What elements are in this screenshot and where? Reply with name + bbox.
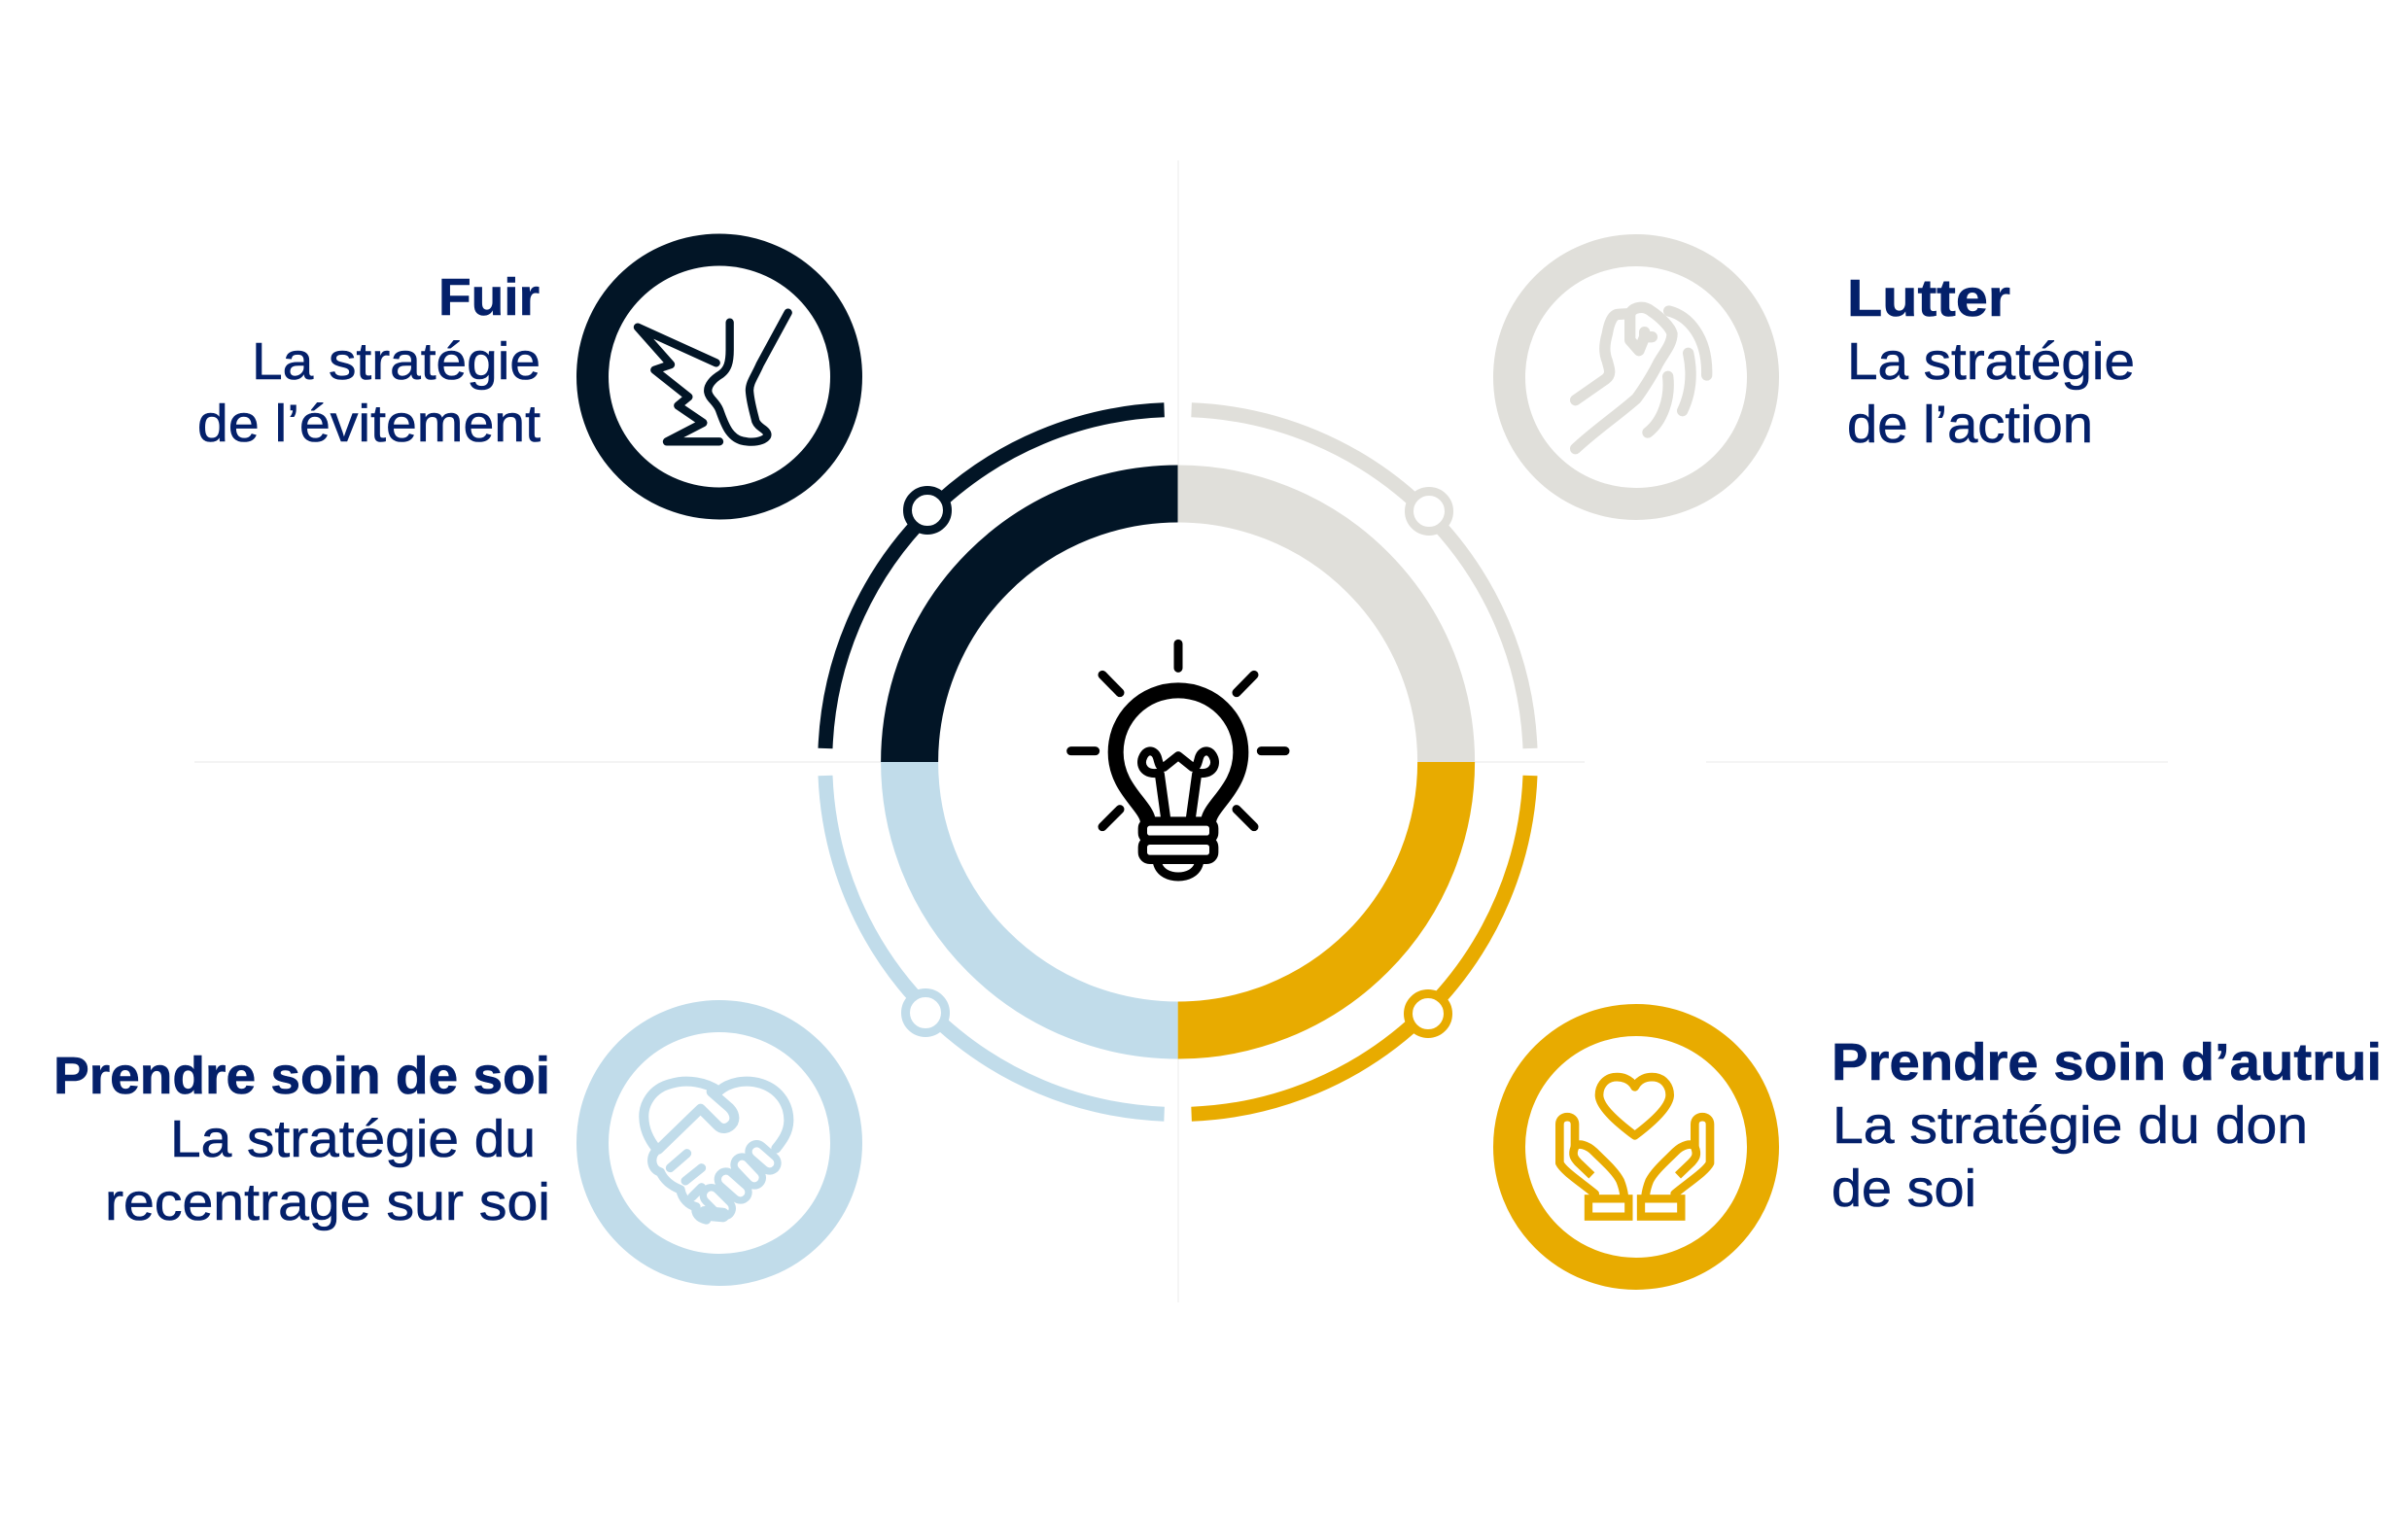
icon: light bulb: [1071, 643, 1285, 877]
text: Lutter: La stratégie: [1847, 333, 2135, 391]
text: Prendre soin de soi: [53, 1048, 550, 1231]
icon: running foot: [638, 313, 788, 442]
text: Lutter: de l’action: [1847, 397, 2093, 454]
panel: Prendre soin d'autrui: [1509, 1021, 2382, 1273]
text: Lutter: Lutter: [1847, 270, 2010, 328]
icon circle: Lutter: [1509, 251, 1763, 503]
text: Prendre soin de soi: recentrage sur soi: [105, 1174, 550, 1231]
ring segment: dark navy: [910, 494, 1178, 762]
text: Fuir: La stratégie: [252, 333, 541, 391]
text: Prendre soin d'autrui: Prendre soin d’autrui: [1832, 1034, 2382, 1091]
icon circle: Fuir: [593, 250, 846, 503]
text: Fuir: de l’évitement: [197, 396, 541, 453]
text: Lutter: [1847, 270, 2135, 454]
text: Prendre soin de soi: Prendre soin de soi: [53, 1048, 550, 1105]
outer arc: gold with node: [1192, 776, 1530, 1114]
outer arc: dark navy with node: [825, 410, 1165, 748]
text: Fuir: Fuir: [438, 269, 540, 327]
text: Fuir: [197, 269, 541, 453]
text: Prendre soin d'autrui: de soi: [1832, 1160, 1976, 1218]
panel: Fuir: [197, 250, 846, 503]
outer arc: grey with node: [1192, 410, 1530, 748]
panel: Prendre soin de soi: [53, 1017, 846, 1269]
central ring: [910, 494, 1447, 1030]
ring segment: light blue: [910, 762, 1178, 1030]
text: Prendre soin d'autrui: [1832, 1034, 2382, 1218]
text: Prendre soin de soi: La stratégie du: [170, 1111, 536, 1168]
ring segment: gold: [1178, 762, 1447, 1030]
outer arc: light blue with node: [825, 776, 1165, 1114]
icon: raised fist: [1576, 307, 1707, 449]
panel: Lutter: [1509, 251, 2135, 503]
icon: hands holding heart: [1559, 1077, 1710, 1217]
ring segment: grey: [1178, 494, 1447, 762]
icon: handshake heart: [644, 1082, 788, 1220]
text: Prendre soin d'autrui: La stratégie du don: [1832, 1097, 2308, 1155]
icon circle: Prendre soin de soi: [593, 1017, 846, 1269]
icon circle: Prendre soin d'autrui: [1509, 1021, 1763, 1273]
